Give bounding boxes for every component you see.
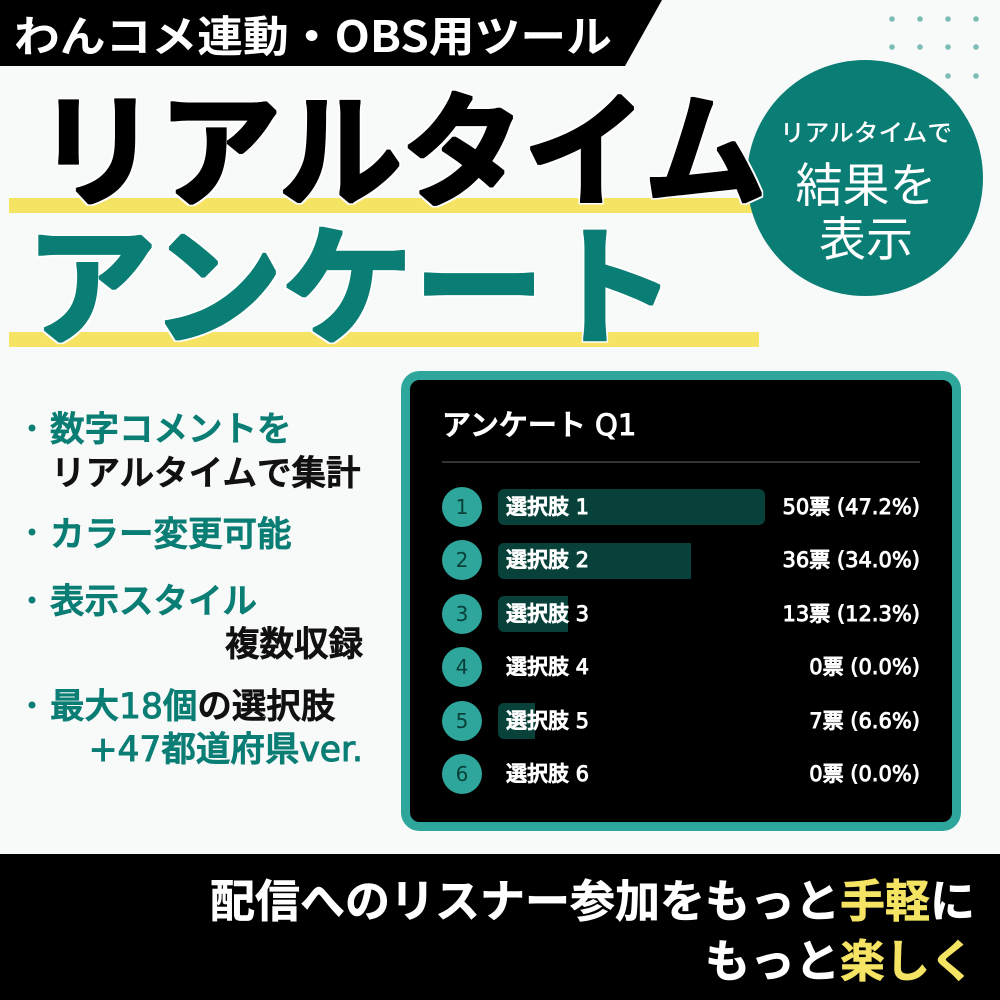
feature: 表示スタイル [28, 582, 363, 665]
callout circle: 表示 [819, 201, 913, 270]
bottom banner [0, 854, 1000, 1000]
feature: 数字コメント [28, 410, 360, 494]
feature: 選択肢 [28, 687, 363, 770]
bottom banner: 配信へのリスナー参加をもっと手軽に [210, 865, 975, 930]
feature: 表示スタイル: 複数収録 [225, 625, 363, 665]
row 2: 選択肢 2 [506, 548, 589, 572]
row 1 [442, 487, 920, 527]
feature list [28, 410, 363, 770]
row 5: 5 [456, 709, 468, 733]
row 1: 50票 (47.2%) [782, 495, 920, 519]
title: リアルタイム: リアルタイム [36, 52, 766, 232]
callout circle [747, 60, 983, 296]
title: アンケート: アンケート [25, 184, 676, 372]
row 6: 6 [456, 762, 468, 786]
top banner: わんコメ連動・OBS用ツール [14, 3, 612, 65]
callout circle: 結果を [796, 147, 936, 216]
row 2: 2 [456, 548, 468, 572]
row 1: 1 [456, 495, 468, 519]
feature: 選択肢: 最大18個の選択肢 [50, 687, 335, 727]
row 6: 0票 (0.0%) [809, 762, 920, 786]
feature: 選択肢: +47都道府県ver. [89, 730, 363, 770]
row 5: 選択肢 5 [506, 709, 589, 733]
row 4: 選択肢 4 [506, 655, 589, 679]
feature: 表示スタイル: 表示スタイル [50, 582, 257, 622]
callout circle: リアルタイムで [780, 113, 952, 148]
panel heading: アンケート Q1 [442, 408, 636, 442]
row 2: 36票 (34.0%) [782, 548, 920, 572]
row 6 [442, 754, 920, 794]
row 3: 3 [456, 602, 468, 626]
feature: 数字コメント: 数字コメントを [50, 410, 292, 450]
row 4: 0票 (0.0%) [809, 655, 920, 679]
row 3: 選択肢 3 [506, 602, 589, 626]
row 4 [442, 647, 920, 687]
panel: アンケート結果 [406, 376, 956, 826]
row 3: 13票 (12.3%) [782, 602, 920, 626]
feature: 数字コメント: リアルタイムで集計 [51, 454, 360, 494]
bottom banner: もっと楽しく [705, 925, 975, 990]
row 2 [442, 540, 920, 580]
row 4: 4 [456, 655, 468, 679]
decorative dots [889, 16, 979, 79]
yellow highlight lines [9, 198, 759, 347]
row 1: 選択肢 1 [506, 495, 589, 519]
row 5 [442, 701, 920, 741]
row 3 [442, 594, 920, 634]
feature: カラー変更: カラー変更可能 [50, 515, 292, 555]
row 6: 選択肢 6 [506, 762, 589, 786]
row 5: 7票 (6.6%) [809, 709, 920, 733]
